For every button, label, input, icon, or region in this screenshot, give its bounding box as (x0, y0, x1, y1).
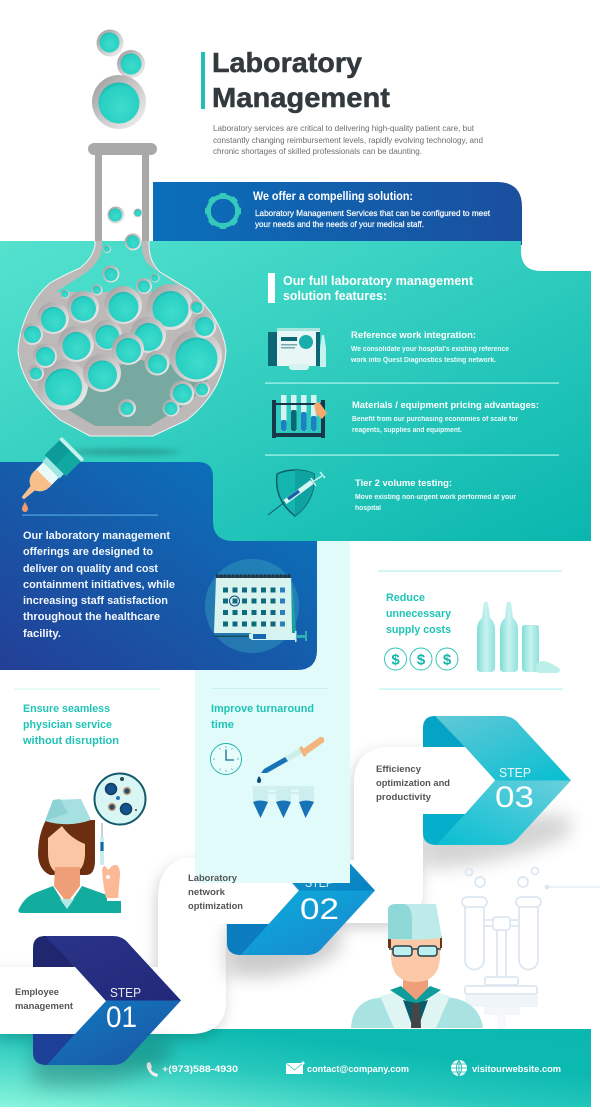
step 02 number (300, 875, 339, 926)
flask bubbles (21, 206, 222, 417)
step 01 number (106, 985, 141, 1034)
icon: vaccine box (268, 328, 326, 370)
icon: pipette and tubes (252, 737, 324, 818)
offerings text: Our laboratory management (23, 530, 170, 542)
title: Management (212, 82, 390, 113)
text: unnecessary (386, 608, 452, 620)
offerings text: facility. (23, 628, 61, 640)
step 02 label: network (188, 887, 226, 898)
text (211, 703, 314, 731)
intro paragraph: constantly changing reimbursement levels, rapidly evolving technology, and (213, 135, 483, 145)
step 02 label (188, 873, 243, 912)
offerings text: increasing staff satisfaction (23, 595, 168, 607)
footer (0, 1029, 591, 1107)
white notch: step 02 (180, 858, 298, 924)
title: Laboratory (212, 47, 362, 78)
feature: pricing advantages: reagents, supplies and equipment. (352, 427, 462, 434)
offerings text: throughout the healthcare (23, 611, 160, 623)
step 03 number: STEP (499, 765, 531, 780)
section: ensure physician service (14, 688, 160, 913)
step 01 label (15, 987, 74, 1012)
title accent bar (201, 52, 205, 109)
icon: gear (205, 193, 241, 229)
step 01 number: STEP (110, 985, 141, 1000)
white card: step 03 cover (300, 747, 495, 923)
icon: dollar coins: $ (417, 652, 426, 668)
shadow: step 01 (33, 1040, 170, 1087)
white card: step 03 backing (300, 747, 495, 923)
icon: flask with bubbles (18, 30, 226, 454)
shadow: step 02 (227, 925, 340, 977)
offerings text: offerings are designed to (23, 546, 153, 558)
icon: dollar coins (384, 648, 458, 670)
contact: phone: +(973)588-4930 (162, 1064, 238, 1075)
chevron: step 03 (423, 716, 571, 845)
intro paragraph: Laboratory services are critical to delivering high-quality patient care, but (213, 123, 475, 133)
text: Reduce (386, 592, 425, 604)
step 03 number: 03 (495, 781, 534, 814)
step 02 number: 02 (300, 893, 339, 926)
features heading: solution features: (283, 289, 387, 303)
step 03 label (376, 764, 450, 803)
step 01 label: Employee (15, 987, 59, 998)
offer text: Laboratory Management Services that can be configured to meet (255, 208, 491, 218)
white card: step 01 and 02 backing (0, 858, 298, 1034)
feature: reference work integration (268, 328, 509, 370)
text: time (211, 719, 234, 731)
text: Improve turnaround (211, 703, 314, 715)
white notch: step 01 (0, 967, 106, 1034)
icon: test tube stand outline (462, 868, 600, 1029)
feature: tier 2 volume testing: Move existing non-urgent work performed at your (355, 494, 516, 501)
step 02 label: optimization (188, 901, 243, 912)
icon: dropper bottle (12, 437, 84, 512)
section: improve turnaround (210, 688, 328, 818)
contact: website (451, 1060, 561, 1076)
text: Reference work integration: (351, 330, 476, 341)
offer heading: We offer a compelling solution: (253, 191, 413, 203)
panel: pale backing under blue corner (195, 541, 350, 701)
chevron: step 01 (33, 936, 181, 1065)
text: supply costs (386, 624, 451, 636)
text: Tier 2 volume testing: (355, 478, 452, 489)
icon: calendar and syringe (205, 559, 307, 653)
icon: clock (210, 744, 242, 774)
section: reduce supply costs (378, 570, 563, 690)
offerings text: containment initiatives, while (23, 579, 175, 591)
panel: blue offerings (0, 462, 317, 670)
icon: dollar coins: $ (391, 652, 400, 668)
step 02 number: STEP (305, 875, 333, 890)
feature: reference work integration: We consolidate your hospital's existing reference (351, 346, 509, 353)
step 03 label: Efficiency (376, 764, 422, 775)
intro paragraph (213, 123, 483, 156)
feature: pricing advantages (272, 395, 539, 438)
text (22, 703, 119, 747)
icon: shield with syringe (268, 470, 325, 516)
contact: phone (147, 1062, 238, 1077)
features heading (268, 273, 474, 303)
offer text (255, 208, 491, 229)
intro paragraph: chronic shortages of skilled professionals can be daunting. (213, 146, 422, 156)
illustration: nurse (18, 799, 121, 913)
step 03 number (495, 765, 534, 814)
illustration: doctor (351, 904, 483, 1028)
panel: solution offer banner (153, 182, 522, 245)
rising bubbles (92, 30, 146, 129)
step 01 number: 01 (106, 1001, 137, 1034)
features heading: Our full laboratory management (283, 274, 474, 288)
feature: tier 2 volume testing: hospital (355, 505, 381, 512)
offerings text (23, 530, 175, 640)
text: physician service (23, 719, 112, 731)
text: without disruption (22, 735, 119, 747)
text: Materials / equipment pricing advantages: (352, 400, 539, 411)
shadow: step 03 (423, 815, 570, 868)
icon: ampoules (477, 602, 560, 673)
title (212, 47, 390, 113)
step 01 label: management (15, 1001, 74, 1012)
feature: reference work integration: work into Quest Diagnostics testing network. (350, 357, 496, 364)
feature: pricing advantages: Benefit from our purchasing economies of scale for (352, 416, 518, 423)
panel: features teal background (0, 241, 591, 541)
offerings text: deliver on quality and cost (23, 563, 158, 575)
white notch: step 03 (354, 747, 495, 814)
feature: tier 2 volume testing (268, 470, 516, 516)
icon: test tube rack (272, 395, 327, 438)
text (386, 592, 452, 636)
contact: email: contact@company.com (307, 1064, 409, 1075)
icon: petri dish (94, 774, 146, 824)
icon: dollar coins: $ (443, 652, 452, 668)
chevron: step 02 (227, 826, 375, 955)
panel: pale cyan column (195, 541, 350, 883)
contact: website: visitourwebsite.com (472, 1064, 561, 1075)
text: Ensure seamless (23, 703, 110, 715)
step 02 label: Laboratory (188, 873, 238, 884)
offer text: your needs and the needs of your medical staff. (255, 219, 424, 229)
contact: email (286, 1062, 409, 1075)
step 03 label: productivity (376, 792, 432, 803)
step 03 label: optimization and (376, 778, 450, 789)
